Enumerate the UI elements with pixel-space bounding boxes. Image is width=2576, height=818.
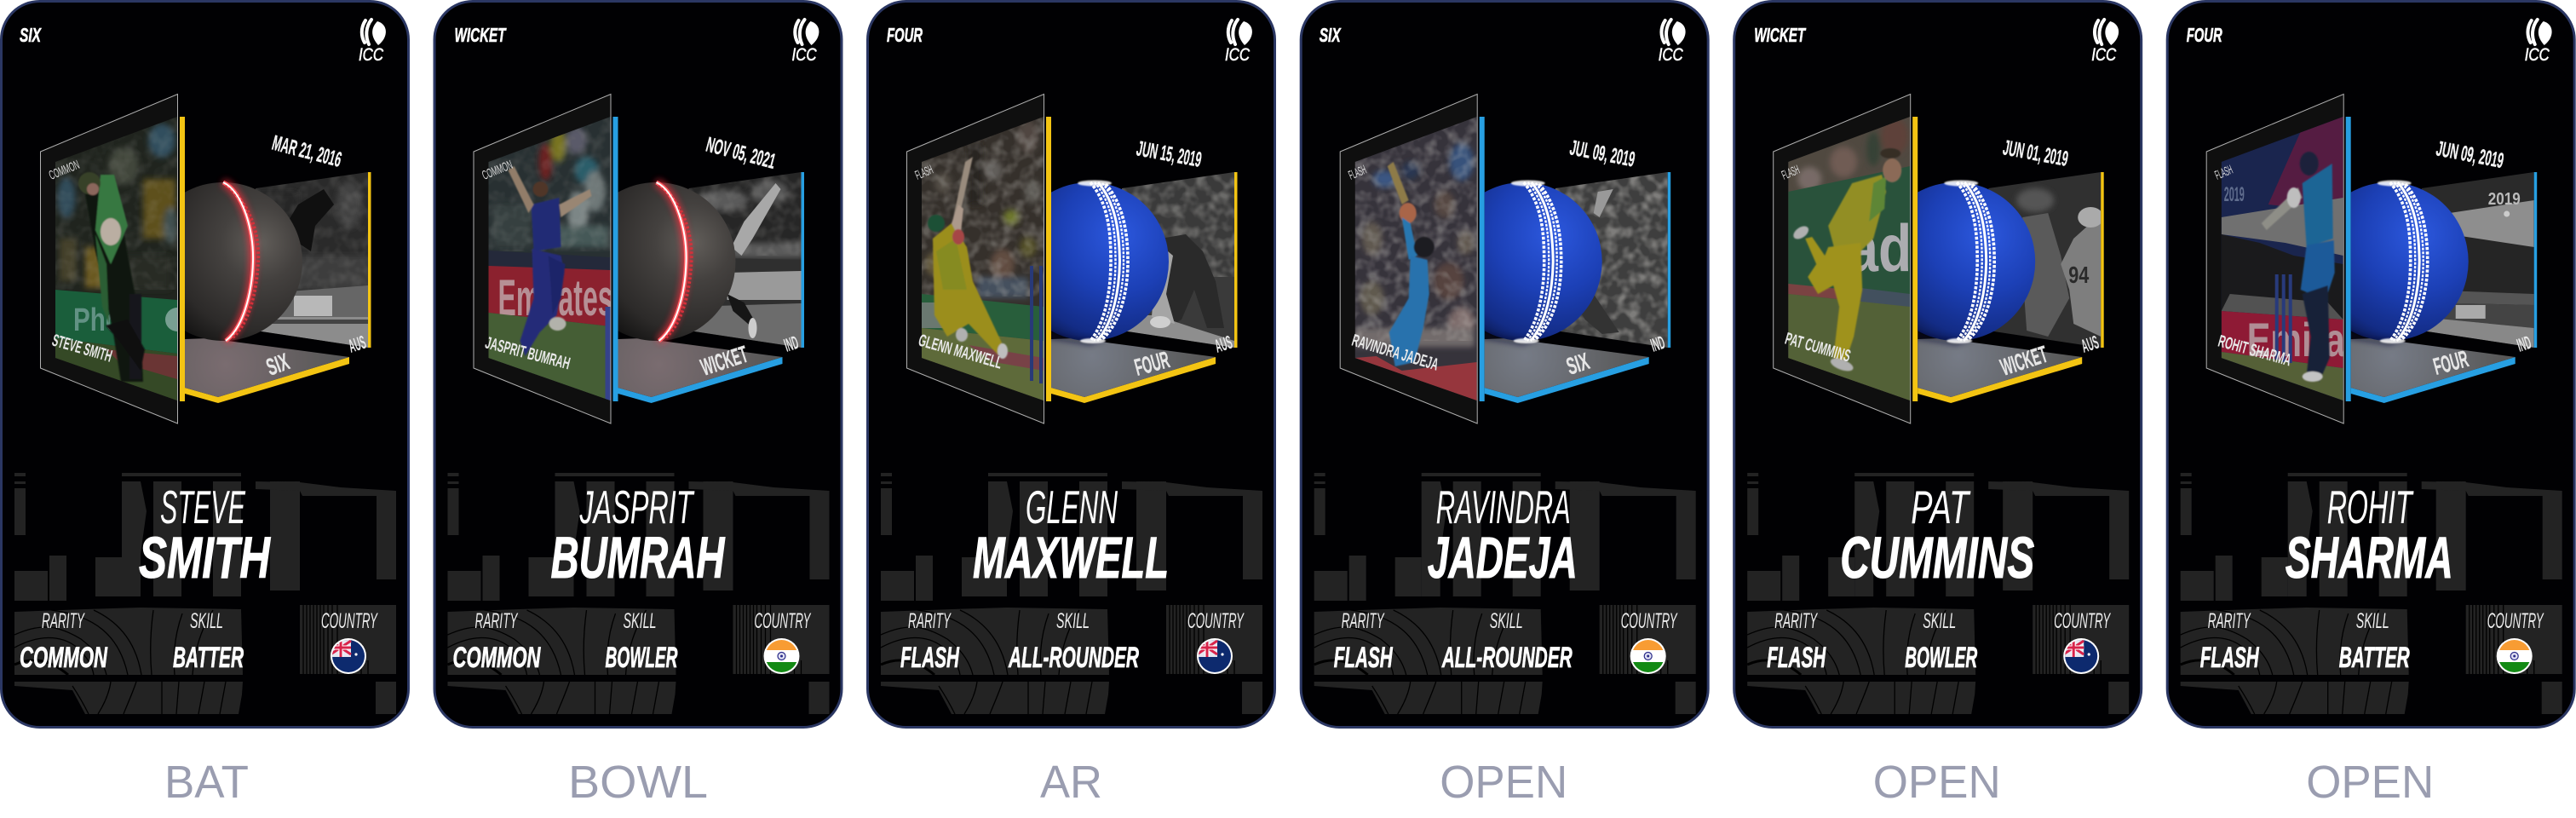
match date: JUN 15, 2019 xyxy=(1135,136,1204,172)
opponent photo xyxy=(251,166,371,349)
last name: SMITH xyxy=(139,525,272,590)
stat: rarity xyxy=(20,609,108,674)
country code: IND xyxy=(781,331,801,356)
first name: JASPRIT xyxy=(579,481,694,533)
opponent photo: 2019 xyxy=(2488,190,2521,209)
glass panel xyxy=(1774,94,1911,423)
player name on photo: GLENN MAXWELL xyxy=(917,331,1004,373)
icon: ICC logo xyxy=(359,20,386,65)
floor label: SIX xyxy=(262,349,293,381)
event tag: SIX xyxy=(1320,24,1342,46)
stat: rarity: COMMON xyxy=(20,642,108,674)
stat: skill: SKILL xyxy=(1923,609,1956,633)
panel: card Steve Smith, BAT xyxy=(2,2,409,808)
player photo xyxy=(55,117,177,400)
icon: blue cricket ball xyxy=(1010,181,1169,345)
glass panel xyxy=(474,94,611,423)
stat: country: COUNTRY xyxy=(1187,609,1245,633)
icon: ICC logo: ICC xyxy=(792,45,817,65)
accent strip xyxy=(2346,117,2351,401)
panel outline xyxy=(906,94,1044,423)
player photo xyxy=(489,117,610,400)
stat: rarity: COMMON xyxy=(453,642,541,674)
match date: JUN 09, 2019 xyxy=(2435,136,2505,173)
stat: skill xyxy=(173,609,244,674)
first name: RAVINDRA xyxy=(1436,481,1571,533)
stat: rarity xyxy=(900,609,960,674)
panel: card Jasprit Bumrah, BOWL xyxy=(434,2,842,808)
event tag: WICKET xyxy=(455,24,507,46)
panel outline xyxy=(2206,94,2343,423)
category caption: BOWL xyxy=(568,757,708,808)
stat: country xyxy=(321,609,378,674)
floor xyxy=(2351,338,2516,403)
category caption: OPEN xyxy=(1440,757,1567,808)
floor label: FOUR xyxy=(1132,346,1172,381)
card frame xyxy=(1734,2,2142,728)
player photo: ad xyxy=(1848,210,1912,285)
country code: AUS xyxy=(346,331,369,357)
stat: rarity: RARITY xyxy=(2208,609,2251,633)
stat: rarity: FLASH xyxy=(1767,642,1826,674)
rarity label: FLASH xyxy=(1347,163,1369,183)
country code: AUS xyxy=(2079,331,2102,357)
glass panel xyxy=(1340,94,1477,423)
stat: skill: BOWLER xyxy=(1905,642,1977,674)
panel outline xyxy=(41,94,177,423)
stat: rarity xyxy=(1767,609,1826,674)
category caption: AR xyxy=(1040,757,1102,808)
opponent photo: 94 xyxy=(2068,262,2090,288)
player photo xyxy=(1788,117,1910,400)
floor xyxy=(1051,338,1216,403)
card frame xyxy=(1301,2,1708,728)
player photo: 2019 xyxy=(2224,183,2245,206)
stat: skill: SKILL xyxy=(624,609,656,633)
player photo: Emira xyxy=(2247,313,2345,366)
icon: ICC logo: ICC xyxy=(359,45,384,65)
player name on photo: PAT CUMMINS xyxy=(1783,330,1853,366)
rarity label: FLASH xyxy=(2213,163,2235,183)
floor label: WICKET xyxy=(1997,341,2050,381)
icon: ICC logo xyxy=(1225,20,1252,65)
stat: rarity: RARITY xyxy=(908,609,952,633)
icon: ICC logo xyxy=(792,20,819,65)
background texture xyxy=(1747,473,2129,714)
player photo xyxy=(922,117,1044,400)
rarity label: COMMON xyxy=(480,158,515,183)
glass panel xyxy=(2206,94,2343,423)
first name: ROHIT xyxy=(2327,481,2414,533)
icon: ICC logo: ICC xyxy=(1225,45,1251,65)
background texture xyxy=(2181,473,2562,714)
accent strip right xyxy=(1234,172,1237,348)
opponent photo xyxy=(2418,166,2537,349)
panel outline xyxy=(1340,94,1477,423)
stat: country xyxy=(755,609,812,674)
icon: ICC logo xyxy=(2091,20,2119,65)
floor xyxy=(618,338,782,403)
stat: country xyxy=(1621,609,1678,674)
glass panel xyxy=(906,94,1044,423)
accent strip xyxy=(180,117,185,401)
icon: ICC logo: ICC xyxy=(2525,45,2550,65)
accent strip xyxy=(1480,117,1485,401)
accent strip right xyxy=(801,172,804,348)
first name: PAT xyxy=(1911,481,1971,533)
floor xyxy=(1485,338,1649,403)
card frame xyxy=(2167,2,2574,728)
card frame xyxy=(867,2,1274,728)
event tag: FOUR xyxy=(2187,24,2222,46)
floor label: FOUR xyxy=(2430,345,2471,380)
accent strip xyxy=(1046,117,1051,401)
last name: SHARMA xyxy=(2286,525,2453,590)
stat: country: COUNTRY xyxy=(321,609,378,633)
rarity label: FLASH xyxy=(1780,163,1802,183)
stat: country xyxy=(2487,609,2544,674)
icon: ICC logo xyxy=(1659,20,1686,65)
stat: skill: BOWLER xyxy=(605,642,678,674)
panel: card Ravindra Jadeja, OPEN xyxy=(1301,2,1708,808)
panel outline xyxy=(474,94,611,423)
floor xyxy=(185,338,349,403)
last name: MAXWELL xyxy=(973,525,1169,590)
icon: ICC logo xyxy=(2525,20,2552,65)
rarity label: COMMON xyxy=(47,158,82,183)
floor xyxy=(1918,338,2082,403)
stat: rarity: RARITY xyxy=(1774,609,1818,633)
accent strip right xyxy=(368,172,371,348)
match date: JUL 09, 2019 xyxy=(1568,135,1636,172)
icon: ICC logo: ICC xyxy=(1659,45,1683,65)
stat: rarity: RARITY xyxy=(42,609,85,633)
match date: NOV 05, 2021 xyxy=(704,133,778,174)
opponent photo xyxy=(1551,166,1670,349)
stat: country: COUNTRY xyxy=(1621,609,1678,633)
country code: IND xyxy=(1648,331,1667,356)
panel: card Glenn Maxwell, AR xyxy=(867,2,1274,808)
event tag: SIX xyxy=(20,24,42,46)
card frame xyxy=(434,2,842,728)
last name: CUMMINS xyxy=(1840,525,2034,590)
accent strip xyxy=(613,117,618,401)
stat: rarity: FLASH xyxy=(2200,642,2260,674)
stat: rarity: RARITY xyxy=(475,609,519,633)
icon: blue cricket ball xyxy=(1877,181,2035,345)
icon: blue cricket ball xyxy=(1444,181,1602,345)
stat: skill: BATTER xyxy=(2339,642,2410,674)
panel: card Rohit Sharma, OPEN xyxy=(2167,2,2574,808)
player photo xyxy=(1354,117,1477,400)
country code: IND xyxy=(2515,331,2533,356)
accent strip xyxy=(1912,117,1918,401)
match date: JUN 01, 2019 xyxy=(2001,135,2070,171)
stat: rarity xyxy=(453,609,541,674)
match date: MAR 21, 2016 xyxy=(269,131,344,172)
stat: skill xyxy=(1441,609,1573,674)
opponent photo xyxy=(1118,166,1237,349)
panel: card Pat Cummins, OPEN xyxy=(1734,2,2142,808)
opponent photo xyxy=(1984,166,2103,349)
card frame xyxy=(2,2,409,728)
stat: skill: SKILL xyxy=(1056,609,1090,633)
background texture xyxy=(1314,473,1696,714)
stat: skill: BATTER xyxy=(173,642,244,674)
stat: country xyxy=(2054,609,2111,674)
player photo: Emirates xyxy=(497,269,613,326)
stat: skill xyxy=(1008,609,1139,674)
rarity label: FLASH xyxy=(913,163,935,183)
opponent photo xyxy=(685,166,804,349)
icon: glowing cricket ball xyxy=(144,182,302,341)
category caption: BAT xyxy=(164,757,249,808)
first name: GLENN xyxy=(1026,481,1118,533)
player name on photo: ROHIT SHARMA xyxy=(2216,332,2293,370)
first name: STEVE xyxy=(160,481,246,533)
stat: skill xyxy=(1905,609,1977,674)
stat: skill xyxy=(605,609,678,674)
stat: country xyxy=(1187,609,1245,674)
player photo: Pho xyxy=(73,302,121,338)
stat: rarity: FLASH xyxy=(1334,642,1394,674)
floor label: WICKET xyxy=(698,341,751,381)
stat: skill: ALL-ROUNDER xyxy=(1441,642,1573,674)
player name on photo: JASPRIT BUMRAH xyxy=(483,334,572,373)
floor label: SIX xyxy=(1563,348,1592,380)
player name on photo: RAVINDRA JADEJA xyxy=(1349,331,1440,375)
category caption: OPEN xyxy=(1873,757,2001,808)
background texture xyxy=(881,473,1262,714)
stat: country: COUNTRY xyxy=(2054,609,2111,633)
stat: skill: SKILL xyxy=(1490,609,1523,633)
country code: AUS xyxy=(1212,331,1235,357)
player photo xyxy=(2222,117,2343,400)
accent strip right xyxy=(2101,172,2104,348)
panel outline xyxy=(1774,94,1911,423)
icon: blue cricket ball xyxy=(2310,181,2469,345)
player name on photo: STEVE SMITH xyxy=(50,331,114,366)
stat: rarity xyxy=(1334,609,1394,674)
icon: ICC logo: ICC xyxy=(2091,45,2117,65)
stat: rarity: FLASH xyxy=(900,642,960,674)
stat: skill: ALL-ROUNDER xyxy=(1008,642,1139,674)
last name: BUMRAH xyxy=(550,525,726,590)
icon: glowing cricket ball xyxy=(578,182,736,341)
background texture xyxy=(448,473,830,714)
event tag: WICKET xyxy=(1754,24,1806,46)
stat: skill xyxy=(2339,609,2410,674)
last name: JADEJA xyxy=(1428,525,1578,590)
category caption: OPEN xyxy=(2306,757,2434,808)
accent strip right xyxy=(2534,172,2537,348)
background texture xyxy=(14,473,396,714)
stat: rarity: RARITY xyxy=(1342,609,1385,633)
accent strip right xyxy=(1668,172,1670,348)
stat: skill: SKILL xyxy=(2356,609,2389,633)
stat: country: COUNTRY xyxy=(755,609,812,633)
event tag: FOUR xyxy=(887,24,923,46)
stat: skill: SKILL xyxy=(190,609,223,633)
stat: rarity xyxy=(2200,609,2260,674)
glass panel xyxy=(41,94,177,423)
